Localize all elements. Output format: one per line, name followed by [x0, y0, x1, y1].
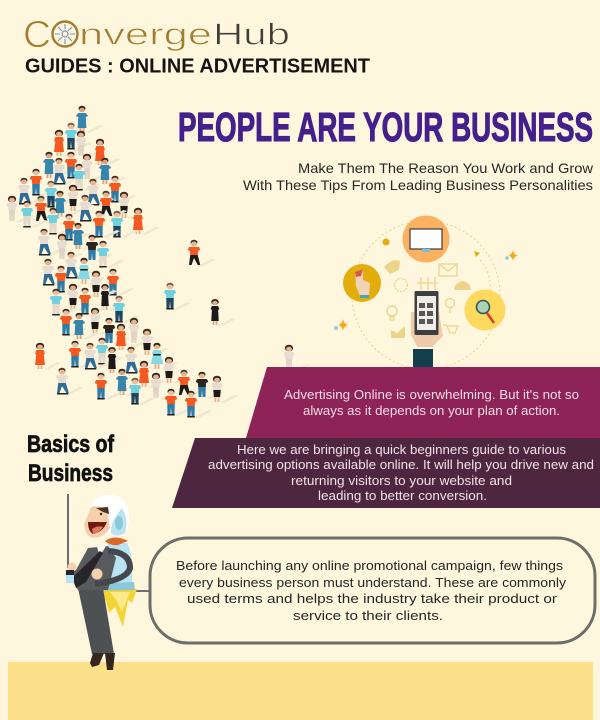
panel text: always as it depends on your plan of action. — [303, 403, 560, 418]
panel: beginners guide — [172, 438, 600, 508]
pale line icons — [387, 264, 458, 333]
callout text: every business person must understand. These are commonly — [179, 575, 567, 590]
panel: advertising overwhelming — [246, 367, 600, 438]
left hand and handle — [66, 562, 76, 583]
logo letters Hub: Hub — [213, 16, 290, 52]
heading: basics of business — [27, 431, 115, 487]
jetpack body — [100, 543, 132, 584]
shoes — [90, 653, 104, 667]
panel text — [208, 442, 594, 503]
scarf — [105, 538, 128, 545]
icon: sparkles — [508, 250, 518, 261]
logo letter C: C — [23, 14, 51, 56]
hair and eye — [96, 507, 109, 514]
logo cog O — [52, 22, 78, 46]
icon: smartphone in hand — [411, 291, 443, 367]
connector line from heading — [67, 494, 69, 568]
panel text: Advertising Online is overwhelming. But it's not so — [284, 387, 579, 402]
tagline — [243, 160, 594, 193]
logo letters nverge: nverge — [79, 16, 212, 52]
jetpack flame — [102, 589, 137, 627]
panel text: leading to better conversion. — [318, 488, 487, 503]
tagline: With These Tips From Leading Business Personalities — [243, 177, 593, 193]
panel text: Here we are bringing a quick beginners guide to various — [237, 442, 566, 457]
suit torso — [68, 546, 116, 590]
panel text — [284, 387, 579, 418]
callout text: used terms and helps the industry take their product or — [187, 591, 558, 606]
heading: basics of business: Basics of — [27, 431, 115, 458]
heading: basics of business: Business — [28, 460, 113, 487]
jetpack arm strap — [95, 551, 130, 584]
callout text: service to their clients. — [293, 608, 443, 623]
icon: monitor circle — [402, 216, 450, 262]
helmet — [90, 495, 129, 536]
callout: basics text bubble — [150, 538, 595, 643]
open mouth — [88, 522, 107, 534]
illustration: jetpack businessman — [66, 495, 137, 670]
face — [84, 506, 110, 538]
icon: hand tap circle — [343, 264, 381, 302]
callout text — [176, 558, 567, 623]
shirt and tie — [97, 546, 106, 556]
panel text: returning visitors to your website and — [291, 473, 512, 488]
legs — [78, 588, 114, 654]
right hand — [92, 568, 102, 580]
callout text: Before launching any online promotional campaign, few things — [176, 558, 564, 573]
subtitle: guides: GUIDES : ONLINE ADVERTISEMENT — [25, 54, 370, 78]
panel text: advertising options available online. It will help you drive new and — [208, 457, 594, 472]
digital marketing illustration — [334, 216, 518, 369]
tagline: Make Them The Reason You Work and Grow — [298, 160, 594, 176]
dashed orbit — [352, 221, 500, 369]
connector line to bubble — [135, 590, 151, 592]
icon: magnifier circle — [464, 290, 506, 330]
crowd arrow of people — [6, 106, 310, 418]
logo: ConvergeHub — [23, 14, 290, 56]
jetpack base — [92, 582, 135, 591]
bottom yellow band — [8, 662, 593, 720]
